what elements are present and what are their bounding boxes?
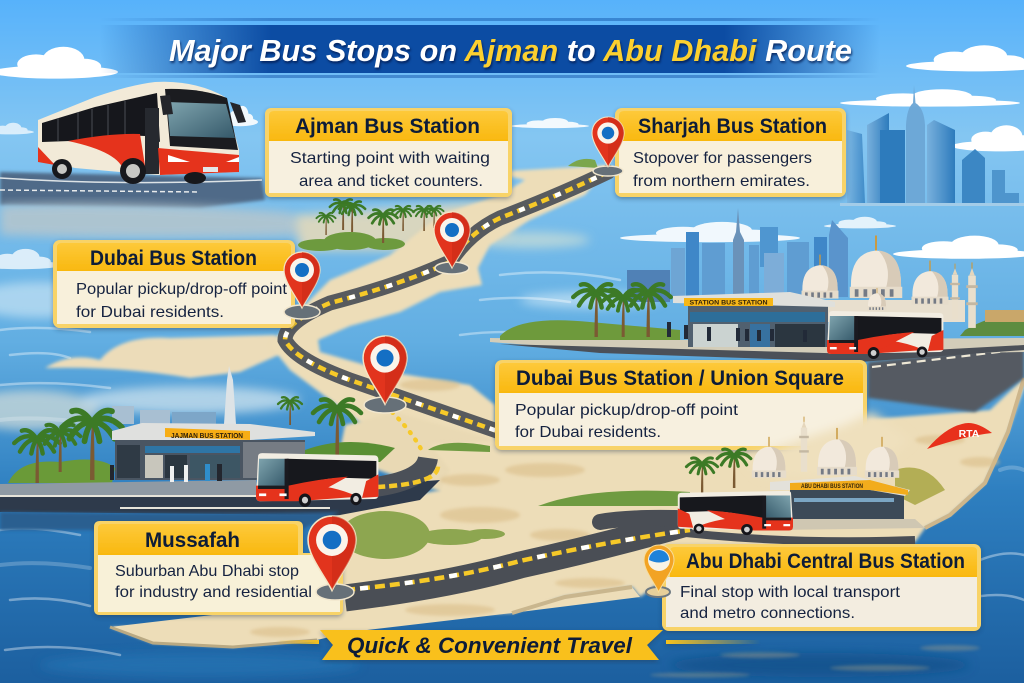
Dubai station scene (490, 236, 1024, 362)
RTA badge (927, 423, 992, 449)
windshield frame (165, 89, 238, 150)
Abu Dhabi station scene (678, 412, 992, 535)
bus body (38, 82, 239, 175)
headlights (168, 155, 190, 162)
shrubs (8, 460, 115, 483)
card: Dubai Bus Station: Dubai Bus Station (90, 247, 257, 270)
station sign text: JAJMAN BUS STATION (171, 431, 243, 440)
card: Sharjah Bus Station: Sharjah Bus Station (638, 115, 827, 138)
card: Ajman Bus Station: Starting point with waiting (290, 150, 490, 167)
card: Abu Dhabi Central Bus Station: and metro connections. (680, 605, 855, 622)
palms (686, 449, 751, 494)
road: lower section (345, 522, 690, 598)
card: Abu Dhabi Central Bus Station: Abu Dhabi Central Bus Station (686, 550, 965, 573)
pin: Ajman (434, 212, 470, 274)
title band (100, 18, 880, 78)
card: Sharjah Bus Station (615, 108, 846, 197)
station building (673, 292, 835, 347)
RTA badge: RTA (959, 428, 980, 440)
ground (0, 480, 258, 495)
station building (112, 423, 315, 480)
sea haze patches (0, 232, 970, 677)
card: Ajman Bus Station (265, 108, 512, 197)
shrubs lower middle (538, 491, 690, 506)
wheels (52, 159, 72, 179)
sand haze behind top palms (295, 200, 520, 250)
rear red panel (38, 147, 55, 165)
shrubs (895, 468, 945, 505)
banner: Quick & Convenient Travel (277, 630, 761, 660)
dark road band, right side (868, 345, 1024, 412)
sea texture (0, 272, 1024, 655)
card: Mussafah (94, 521, 343, 615)
card: Dubai Bus Station / Union Square: Dubai Bus Station / Union Square (516, 367, 844, 390)
middle land below the road (340, 412, 500, 495)
station building (770, 476, 925, 530)
banner: Quick & Convenient Travel: Quick & Convenient Travel (347, 633, 633, 658)
card: Dubai Bus Station: Popular pickup/drop-off point (76, 281, 288, 298)
hero bus (38, 82, 246, 184)
pin: Mussafah (308, 516, 356, 600)
card: Mussafah: Mussafah (145, 529, 240, 552)
pin: Union Square (363, 336, 407, 413)
windshield glass (167, 102, 235, 138)
island: left sandbar (45, 335, 290, 378)
vegetation (298, 159, 690, 559)
route road (285, 172, 915, 598)
bus at Dubai station (827, 311, 943, 359)
card: Dubai Bus Station (53, 240, 295, 328)
bus at Abu Dhabi station (678, 491, 793, 535)
Ajman station scene (0, 366, 395, 507)
card: Mussafah: Suburban Abu Dhabi stop (115, 563, 299, 580)
northern coast land (270, 165, 610, 460)
lane dashes (285, 172, 690, 590)
pin: Sharjah (592, 117, 624, 176)
shrubs (500, 320, 680, 340)
coastal rim (925, 378, 1024, 528)
pin: Abu Dhabi Central (644, 545, 674, 597)
card: Abu Dhabi Central Bus Station: Final stop with local transport (680, 584, 901, 601)
road: connection to bus (375, 458, 428, 487)
people (667, 322, 807, 342)
sand patches (250, 379, 1000, 637)
station sign text: STATION BUS STATION (690, 300, 768, 306)
card: Dubai Bus Station / Union Square (495, 360, 867, 450)
pin: Dubai (284, 252, 320, 319)
dotted link (392, 412, 424, 455)
tan flecks on lower sea (650, 645, 980, 678)
southern main land (110, 378, 1024, 647)
shrubs near Ajman card (298, 232, 405, 251)
red swoosh (68, 134, 146, 172)
title text: Major Bus Stops on Ajman to Abu Dhabi Route (169, 33, 852, 68)
side windows (42, 93, 160, 142)
card: Dubai Bus Station / Union Square: Popular pickup/drop-off point (515, 402, 739, 419)
card: Mussafah: for industry and residential (115, 584, 312, 601)
road: upper section (285, 172, 608, 432)
palms (573, 284, 671, 337)
people (110, 464, 222, 482)
map pins (284, 117, 674, 600)
card: Ajman Bus Station: Ajman Bus Station (295, 115, 480, 138)
front panel (158, 148, 239, 175)
clouds (0, 45, 1024, 269)
mosque (752, 417, 899, 478)
road behind hero bus (0, 172, 320, 238)
shrubs beside Sharjah road (568, 159, 598, 168)
shrubs near Mussafah (340, 511, 505, 559)
station sign text: ABU DHABI BUS STATION (801, 484, 863, 490)
door (145, 108, 159, 174)
sand haze over card corner (745, 412, 910, 480)
shrubs upper middle (428, 443, 490, 452)
card: Abu Dhabi Central Bus Station (662, 544, 981, 631)
dark road band, left side (0, 480, 440, 530)
window mullions (58, 101, 125, 141)
upper right skyline (840, 85, 1024, 206)
palms: top group (316, 199, 444, 243)
card: Ajman Bus Station: area and ticket counters. (299, 173, 483, 190)
ground strip (490, 338, 1024, 355)
mosque (802, 236, 978, 328)
bus at Ajman station (256, 453, 378, 507)
land masses (45, 165, 1024, 647)
palms (14, 397, 361, 483)
distant skyline and tower (112, 366, 236, 426)
card: Dubai Bus Station / Union Square: for Dubai residents. (515, 424, 661, 441)
card: Dubai Bus Station: for Dubai residents. (76, 304, 224, 321)
card: Sharjah Bus Station: from northern emirates. (633, 173, 810, 190)
mirrors (160, 95, 173, 115)
card: Sharjah Bus Station: Stopover for passengers (633, 150, 812, 167)
middle skyline (627, 208, 848, 302)
